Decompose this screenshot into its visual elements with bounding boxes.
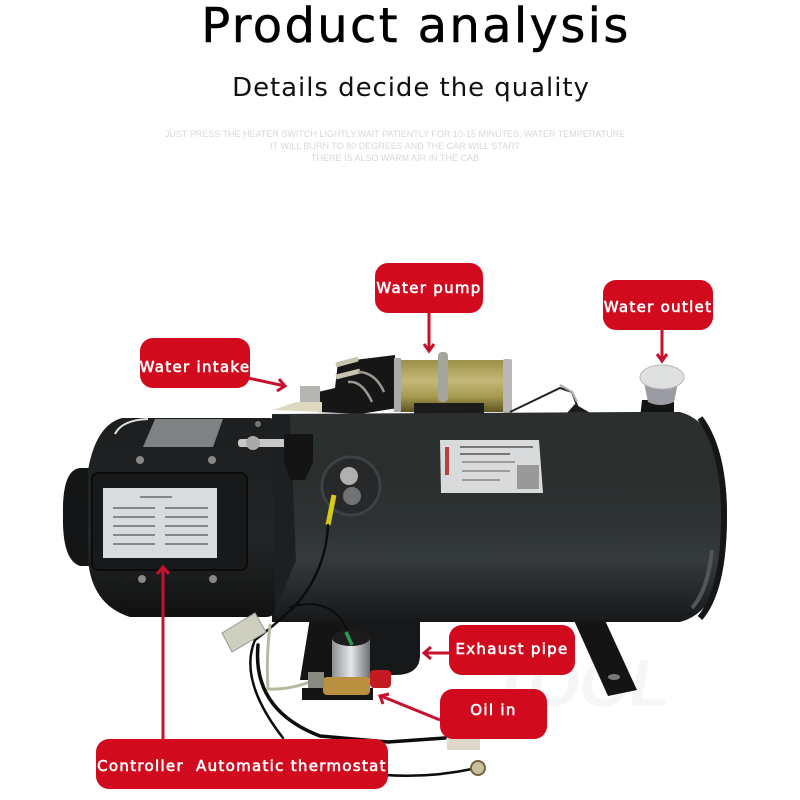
arrow: water outlet: [657, 330, 667, 361]
controller panel: [92, 456, 247, 583]
label: water outlet: [603, 280, 713, 330]
label: controller and automatic thermostat: [96, 739, 388, 789]
front housing: [63, 415, 296, 617]
arrow: controller: [157, 567, 169, 742]
exhaust pipe: [340, 620, 420, 675]
latch: [238, 421, 313, 480]
subtitle: Details decide the quality: [232, 73, 590, 103]
mounting brackets: [300, 616, 637, 700]
label: water pump: [375, 263, 483, 313]
arrow: exhaust pipe: [424, 647, 450, 659]
label: water intake: Water intake: [140, 358, 250, 376]
tank body: [272, 412, 727, 622]
pump fittings: [273, 355, 398, 414]
label: oil in: Oil in: [470, 701, 517, 719]
faint description text: IT WILL BURN TO 80 DEGREES AND THE CAR WILL START: [270, 141, 520, 151]
label: water intake: [140, 338, 250, 388]
wiring connectors: [222, 613, 485, 775]
tank label: [440, 440, 543, 493]
label: controller and automatic thermostat: Controller Automatic thermostat: [97, 757, 387, 775]
water outlet with cap: [636, 365, 684, 428]
label: water outlet: Water outlet: [604, 298, 712, 316]
label: oil in: [440, 689, 547, 739]
faint description text: [165, 129, 625, 163]
label: exhaust pipe: Exhaust pipe: [455, 640, 569, 658]
pump motor: [394, 352, 512, 414]
arrow: water intake: [248, 378, 285, 391]
fuel solenoid valve: [308, 630, 391, 695]
housing emblem and vents: [115, 419, 223, 447]
faint description text: JUST PRESS THE HEATER SWITCH LIGHTLY,WAIT PATIENTLY FOR 10-15 MINUTES, WATER TEMPERATURE: [165, 129, 625, 139]
label: exhaust pipe: [449, 625, 575, 675]
tank end ring: [700, 418, 724, 618]
watermark: TOOL: [490, 646, 670, 720]
arrow: water pump: [424, 313, 434, 351]
sensor wire on tank: [510, 385, 592, 414]
wiring: [250, 525, 472, 776]
arrow: oil in: [380, 694, 440, 720]
faint description text: THERE IS ALSO WARM AIR IN THE CAB: [311, 153, 479, 163]
label: water pump: Water pump: [376, 279, 482, 297]
sensor port: [322, 457, 380, 525]
